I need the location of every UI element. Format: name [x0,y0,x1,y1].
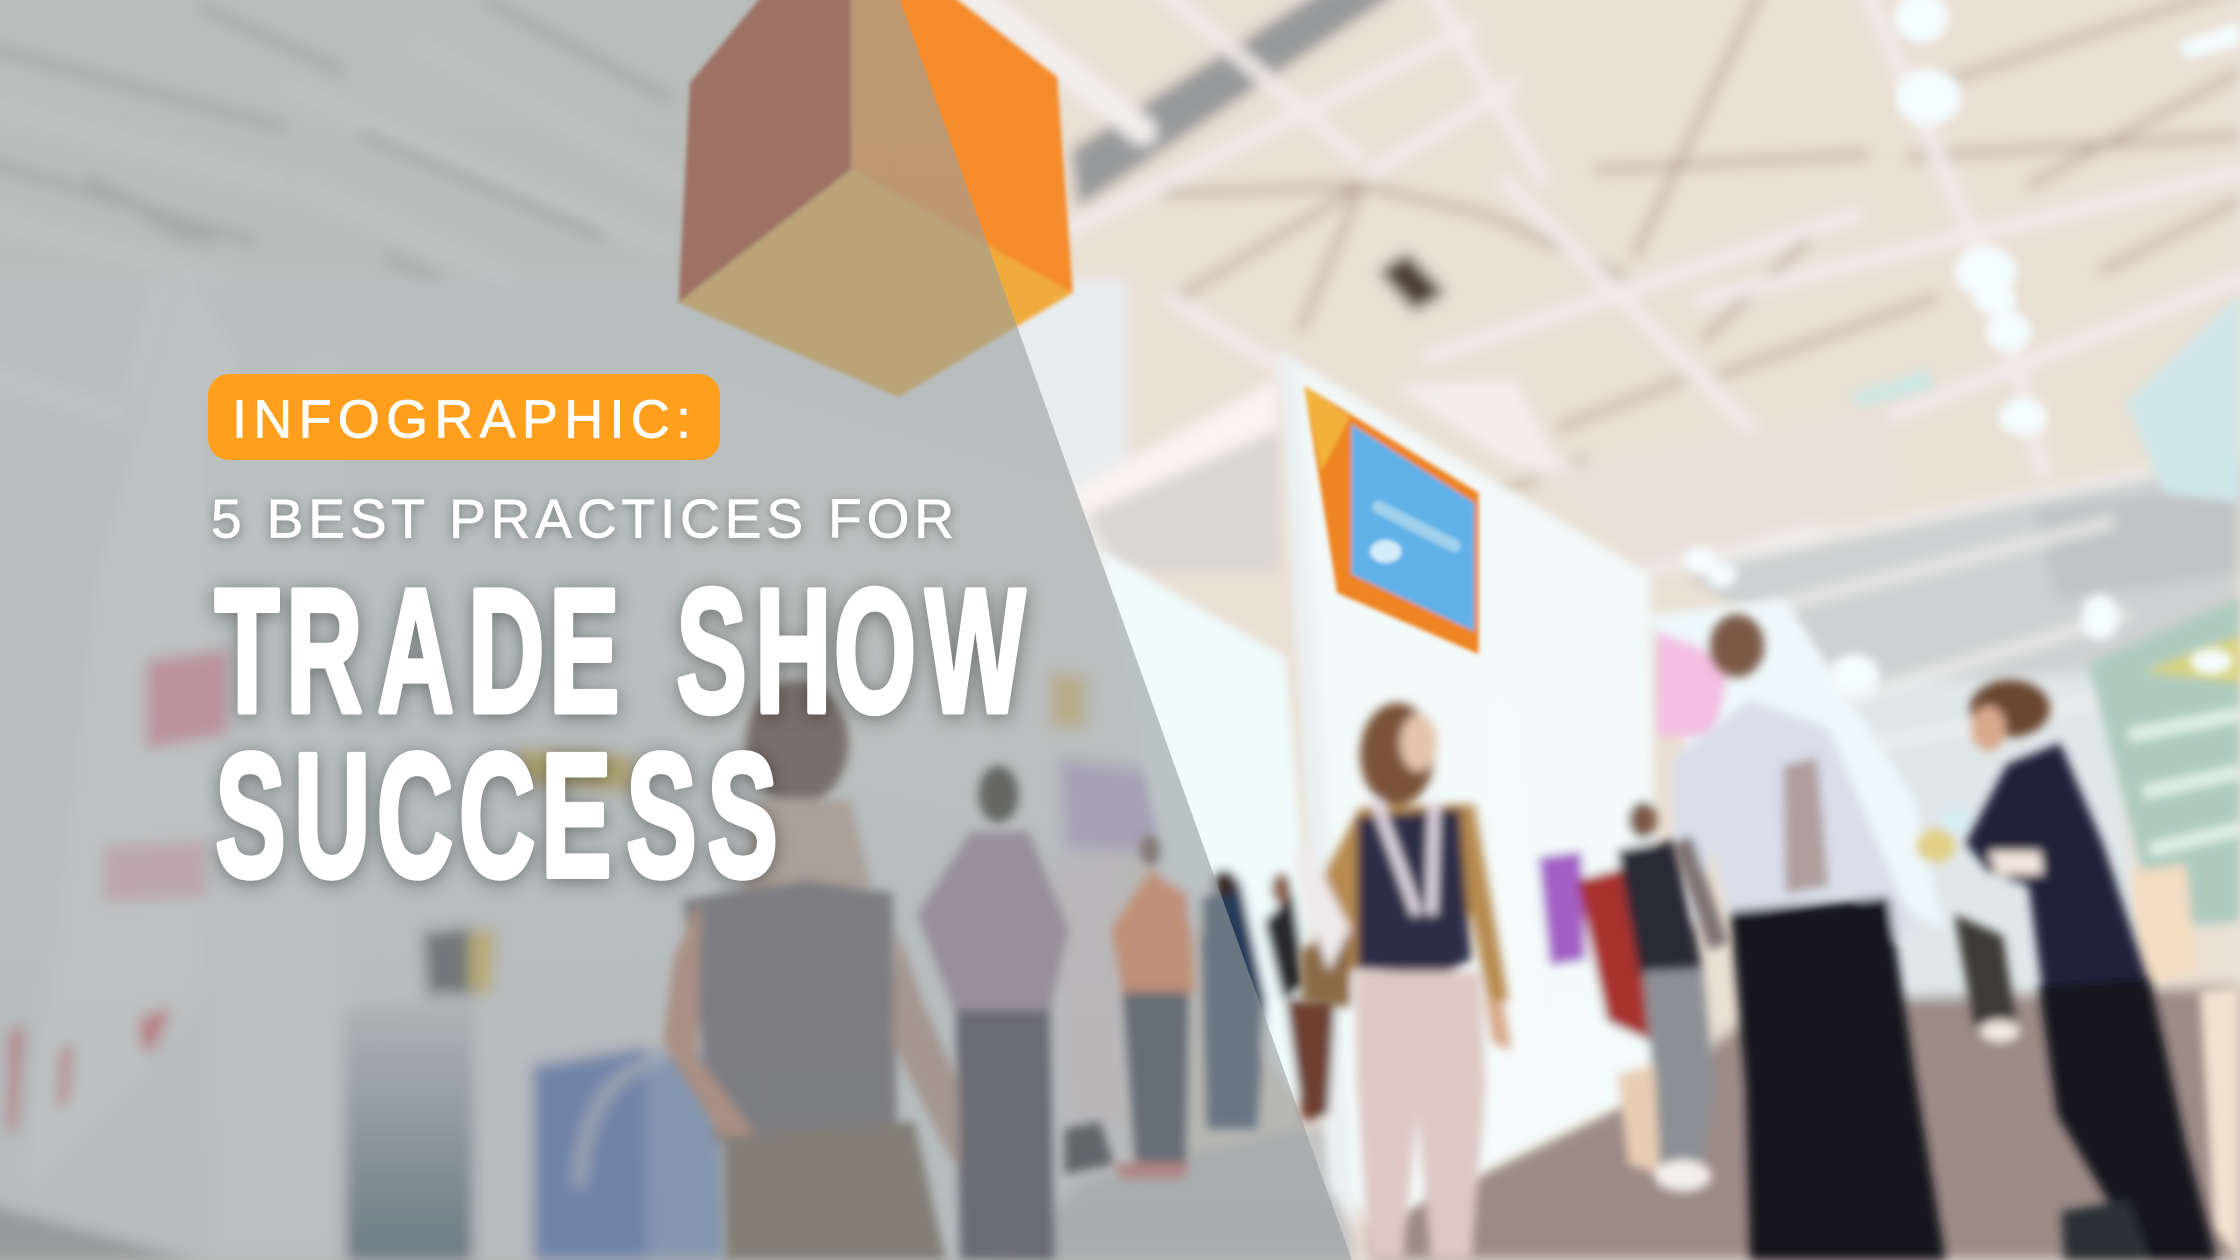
distant visitors [1577,801,2197,1191]
man in dark suit [1966,680,2217,1260]
right signs [2089,293,2240,1260]
left hall ceiling and wall [0,0,1229,1260]
main title [215,553,1025,914]
left floor [0,1191,197,1260]
man in light shirt [1671,614,1946,1260]
title line 2: SUCCESS [215,717,778,914]
title line 1: TRADE SHOW [215,553,1025,749]
right hall ceiling structure [971,0,2240,1007]
cube right face [851,0,1073,293]
left booth panels and signs [6,649,1179,1260]
central booth wall [1100,350,1943,1229]
orange badge [208,374,720,460]
ceiling lights [1684,0,2240,697]
subtitle: 5 BEST PRACTICES FOR [211,488,954,550]
badge text: INFOGRAPHIC: [232,390,691,450]
left-side visitors behind the overlay [663,680,1336,1260]
woman with lanyard [1293,703,1511,1260]
cube left face [679,0,851,303]
grey diagonal overlay panel [0,0,1352,1260]
blue screen [1351,424,1474,631]
cube bottom face [679,170,1073,397]
orange screen frame [1304,386,1479,654]
hanging cube [679,0,1073,397]
far floor [1371,986,2240,1260]
